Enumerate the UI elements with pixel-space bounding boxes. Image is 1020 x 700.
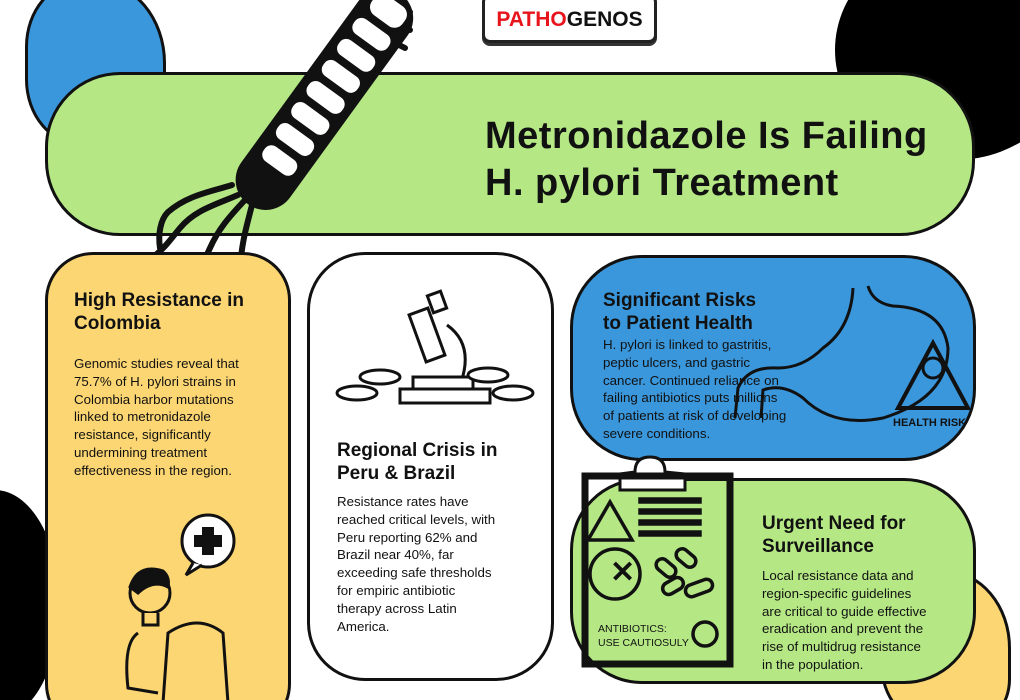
body text: Local resistance data and [762, 568, 914, 583]
heading [603, 290, 756, 334]
decorative blob: yellow bottom-right [880, 570, 1011, 700]
icon: worried person [125, 514, 236, 700]
body text [603, 337, 786, 441]
body text: resistance, significantly [74, 427, 211, 442]
body text: linked to metronidazole [74, 409, 211, 424]
body text: Resistance rates have [337, 494, 469, 509]
logo: PATHOGENOS [496, 8, 643, 31]
heading: High Resistance in [74, 290, 244, 311]
panel: significant risks [570, 255, 976, 461]
decorative blob: blue top-left [25, 0, 166, 146]
decorative blob: black top-right [835, 0, 1020, 160]
decorative blob: black bottom-left [0, 490, 60, 700]
body text: Colombia harbor mutations [74, 392, 234, 407]
icon: clipboard antibiotics: ✕ [610, 556, 635, 589]
body text: reached critical levels, with [337, 512, 495, 527]
icon: stomach health risk [734, 286, 970, 428]
heading: Urgent Need for [762, 513, 906, 534]
body text: undermining treatment [74, 445, 207, 460]
body text: therapy across Latin [337, 601, 457, 616]
body text: are critical to guide effective [762, 604, 927, 619]
heading: Regional Crisis in [337, 440, 497, 461]
body text: cancer. Continued reliance on [603, 373, 779, 388]
heading: to Patient Health [603, 313, 753, 334]
title: Metronidazole Is Failing [485, 115, 928, 157]
heading: Significant Risks [603, 290, 756, 311]
icon: clipboard antibiotics: USE CAUTIOSULY [598, 637, 689, 649]
body text: effectiveness in the region. [74, 463, 232, 478]
icon: microscope with petri dishes [336, 289, 534, 404]
icon: clipboard antibiotics: ANTIBIOTICS: [598, 623, 667, 635]
heading: Surveillance [762, 536, 874, 557]
body text: of patients at risk of developing [603, 408, 786, 423]
icon: bacterium [154, 0, 414, 252]
body text: Genomic studies reveal that [74, 356, 239, 371]
icon: clipboard antibiotics [582, 456, 734, 668]
body text: rise of multidrug resistance [762, 639, 921, 654]
body text [74, 356, 239, 478]
title: H. pylori Treatment [485, 162, 839, 204]
panel: high resistance in colombia [45, 252, 291, 700]
body text: region-specific guidelines [762, 586, 911, 601]
heading: Colombia [74, 313, 161, 334]
panel: urgent need for surveillance [570, 478, 976, 684]
body text: exceeding safe thresholds [337, 565, 492, 580]
heading: Peru & Brazil [337, 463, 455, 484]
body text: America. [337, 619, 389, 634]
body text: 75.7% of H. pylori strains in [74, 374, 236, 389]
body text: H. pylori is linked to gastritis, [603, 337, 771, 352]
body text [337, 494, 495, 634]
body text: eradication and prevent the [762, 621, 923, 636]
title panel [45, 72, 975, 236]
heading [337, 440, 497, 484]
body text: Brazil near 40%, far [337, 547, 454, 562]
body text: peptic ulcers, and gastric [603, 355, 750, 370]
body text: failing antibiotics puts millions [603, 390, 777, 405]
body text: Peru reporting 62% and [337, 530, 477, 545]
heading [74, 290, 244, 334]
title [485, 115, 928, 204]
body text: severe conditions. [603, 426, 710, 441]
body text: in the population. [762, 657, 863, 672]
heading [762, 513, 906, 557]
body text: for empiric antibiotic [337, 583, 455, 598]
panel: regional crisis [307, 252, 554, 681]
body text [762, 568, 927, 672]
logo [482, 0, 657, 43]
